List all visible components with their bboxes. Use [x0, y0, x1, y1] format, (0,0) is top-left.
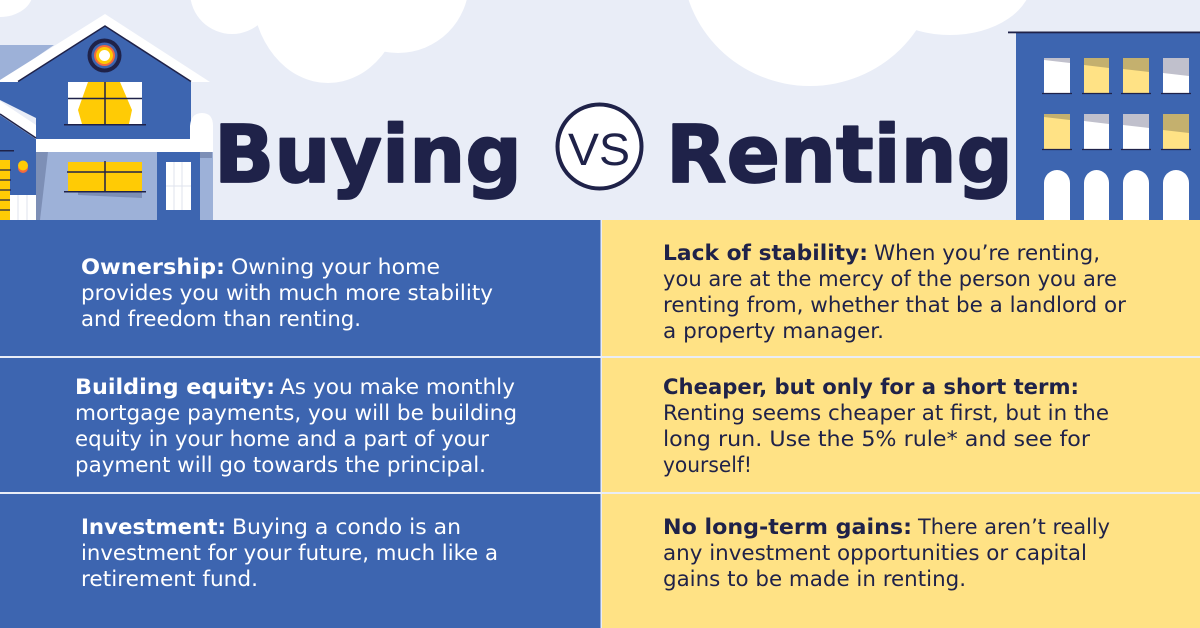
- row: investment: Investment:: [81, 515, 226, 539]
- title: Buying: Buying: [214, 109, 522, 201]
- clouds: [0, 0, 1032, 86]
- icon: VS badge: VS: [568, 124, 630, 175]
- row: investment: [81, 515, 498, 591]
- row: investment: Buying a condo is an: [232, 515, 461, 539]
- row: lack of stability: [663, 241, 1126, 343]
- row: building equity: equity in your home and a part of your: [75, 427, 489, 451]
- icon: apartment building: [1008, 32, 1200, 221]
- row: lack of stability: When you’re renting,: [874, 241, 1100, 265]
- door: [166, 162, 191, 210]
- row: investment: retirement fund.: [81, 567, 258, 591]
- arched doors: [1044, 170, 1070, 221]
- row: no long-term gains: There aren’t really: [917, 515, 1110, 539]
- row: building equity: As you make monthly: [280, 375, 515, 399]
- panel: buying column: [0, 220, 600, 628]
- icon: VS badge: [558, 104, 642, 188]
- row: ownership: and freedom than renting.: [81, 307, 361, 331]
- row: lack of stability: you are at the mercy of the person you are: [663, 267, 1117, 291]
- row: ownership: Owning your home: [231, 255, 440, 279]
- round attic window: [88, 38, 122, 72]
- row: lack of stability: a property manager.: [663, 319, 884, 343]
- row: no long-term gains: any investment opportunities or capital: [663, 541, 1087, 565]
- row: ownership: [81, 255, 493, 331]
- row: ownership: provides you with much more stability: [81, 281, 493, 305]
- lower window: [68, 162, 142, 192]
- row: investment: investment for your future, much like a: [81, 541, 498, 565]
- porch beam: [36, 113, 213, 152]
- row: building equity: payment will go towards the principal.: [75, 453, 486, 477]
- row: building equity: [75, 375, 517, 477]
- windows upper row: [1044, 58, 1070, 93]
- row: cheaper short term: Renting seems cheaper at first, but in the: [663, 401, 1109, 425]
- upper window: [68, 82, 142, 124]
- row: cheaper short term: Cheaper, but only for a short term:: [663, 375, 1079, 399]
- row: ownership: Ownership:: [81, 255, 225, 279]
- panel: renting column: [602, 220, 1200, 628]
- row: cheaper short term: [663, 375, 1109, 477]
- title: Renting: Renting: [666, 109, 1013, 201]
- side wing: [0, 115, 36, 220]
- row: no long-term gains: [663, 515, 1110, 591]
- row: cheaper short term: yourself!: [663, 453, 752, 477]
- row: building equity: mortgage payments, you will be building: [75, 401, 517, 425]
- row: lack of stability: Lack of stability:: [663, 241, 868, 265]
- main gable wall: [0, 26, 191, 139]
- row: no long-term gains: No long-term gains:: [663, 515, 912, 539]
- row: cheaper short term: long run. Use the 5% rule* and see for: [663, 427, 1090, 451]
- icon: house: [0, 14, 213, 220]
- roof: [0, 14, 210, 82]
- row: lack of stability: renting from, whether that be a landlord or: [663, 293, 1126, 317]
- row: no long-term gains: gains to be made in renting.: [663, 567, 966, 591]
- ground floor wall: [36, 152, 213, 220]
- row: building equity: Building equity:: [75, 375, 275, 399]
- windows lower row: [1044, 114, 1070, 149]
